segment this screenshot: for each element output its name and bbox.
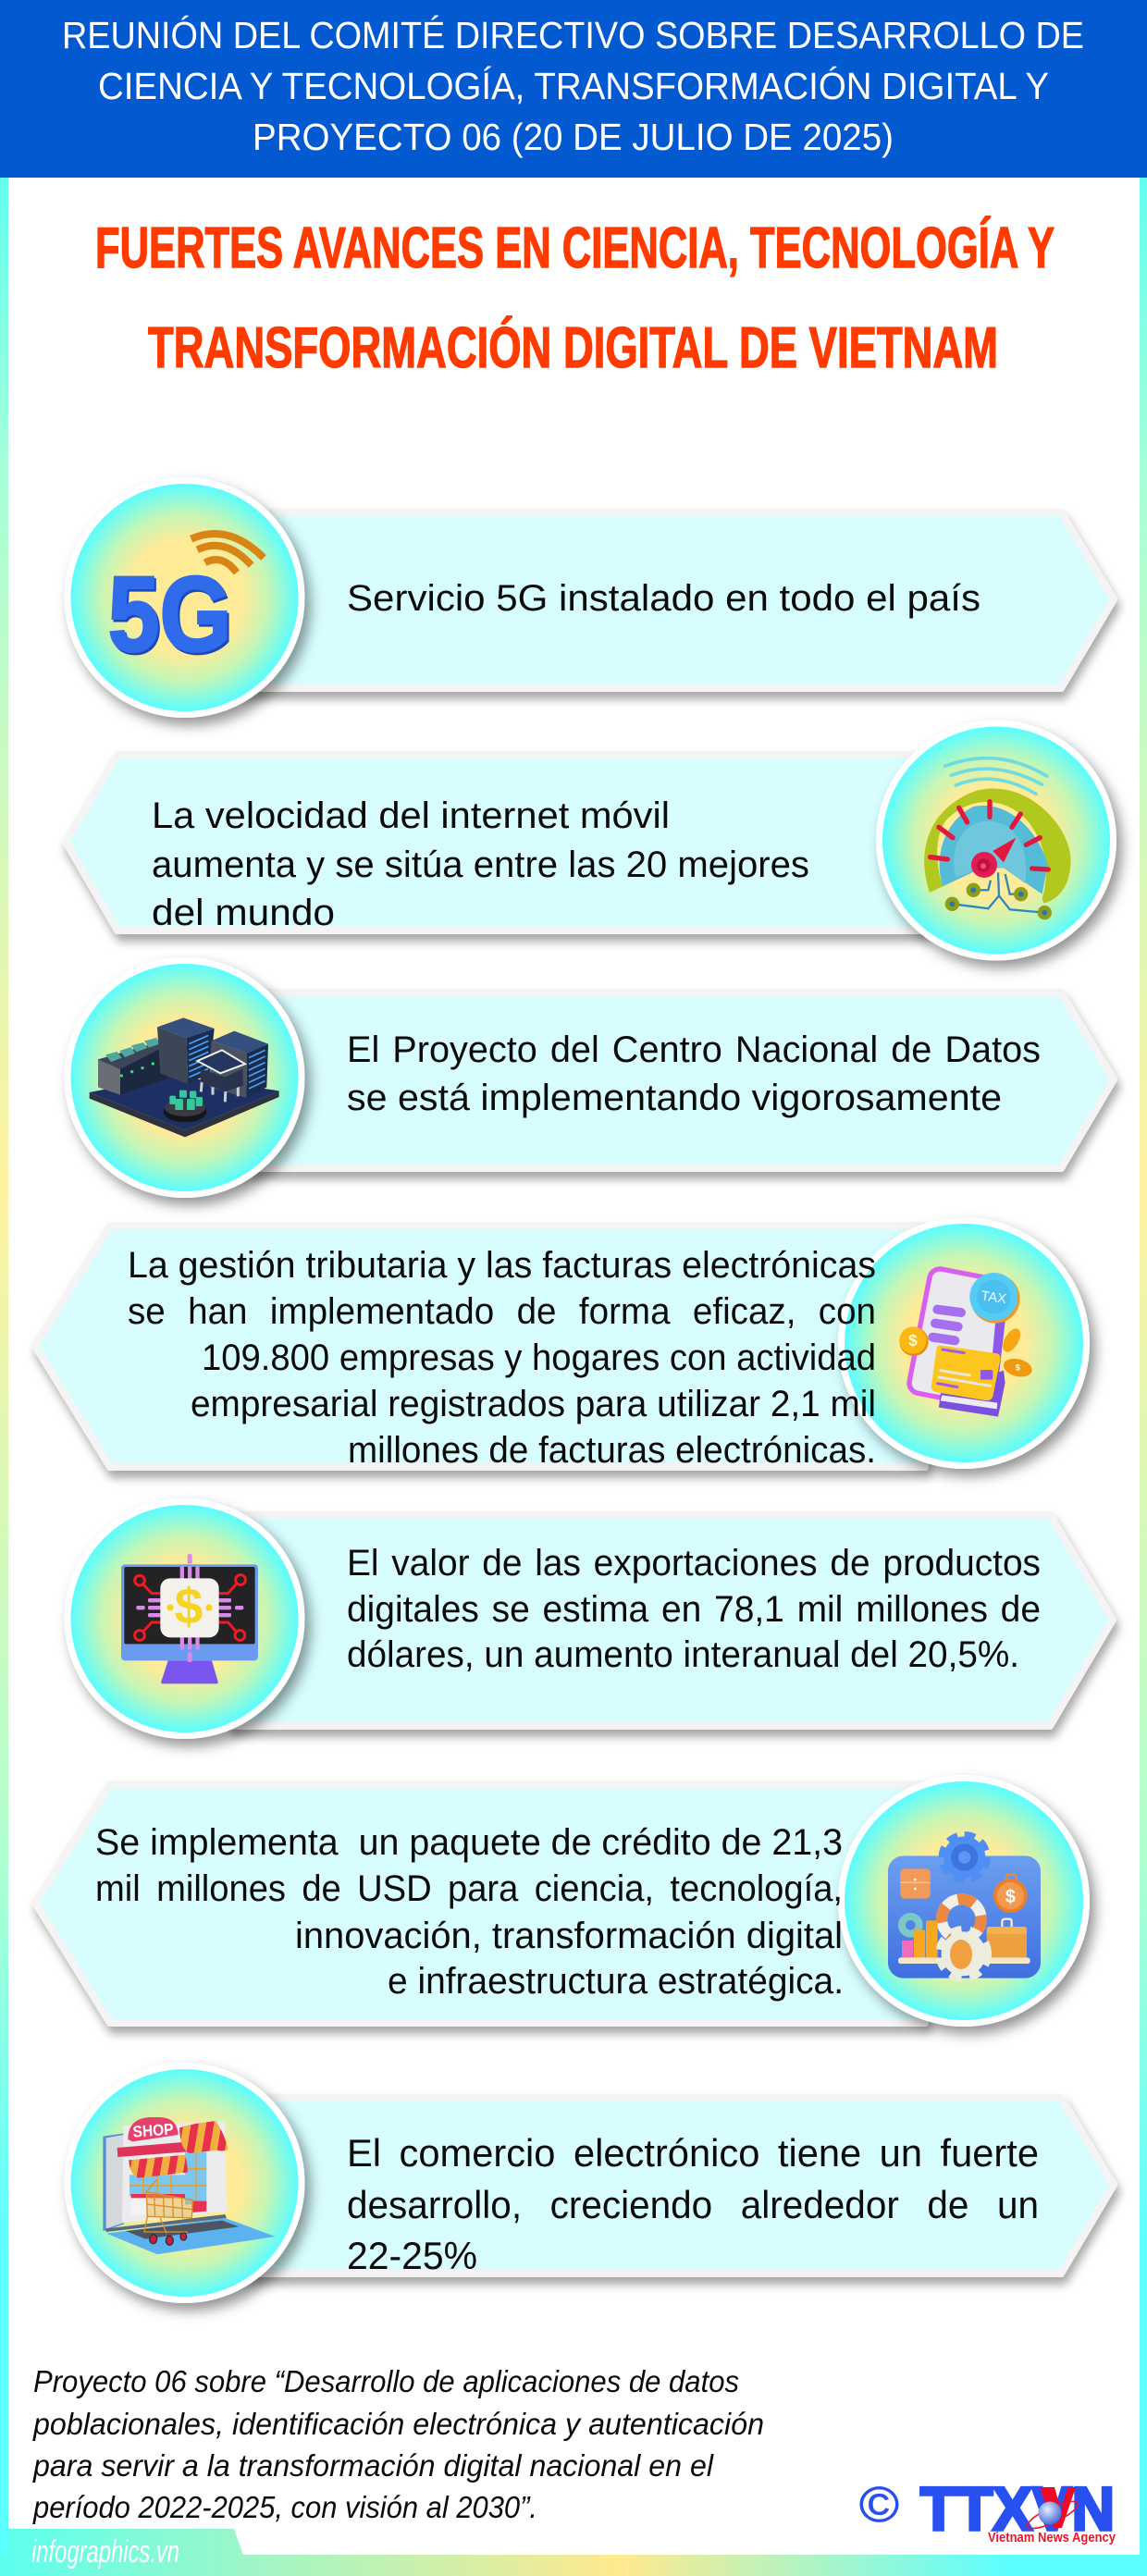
logo: TTXVN Vietnam News Agency: TTXVN <box>920 2474 1115 2543</box>
text 7 <box>347 2131 1039 2277</box>
header band: REUNIÓN DEL COMITÉ DIRECTIVO SOBRE DESARROLLO DE <box>62 14 1084 56</box>
disc 2 <box>876 720 1116 960</box>
icon: online shop on laptop: SHOP <box>132 2120 174 2141</box>
header band: CIENCIA Y TECNOLOGÍA, TRANSFORMACIÓN DIGITAL Y <box>98 65 1049 107</box>
footnote <box>32 2364 764 2524</box>
text 3: El Proyecto del Centro Nacional de Datos <box>347 1029 1041 1070</box>
logo: TTXVN Vietnam News Agency: Vietnam News Agency <box>988 2531 1116 2545</box>
footnote: Proyecto 06 sobre “Desarrollo de aplicaciones de datos <box>33 2364 739 2398</box>
text 4 <box>128 1245 876 1471</box>
icon: speed gauge <box>924 758 1070 918</box>
panel: gestión tributaria <box>35 1217 1090 1471</box>
text 2: del mundo <box>152 893 335 933</box>
disc 4 <box>838 1217 1090 1469</box>
text 4: La gestión tributaria y las facturas electrónicas <box>128 1245 876 1286</box>
text 6: e infraestructura estratégica. <box>388 1961 844 2002</box>
text 7: El comercio electrónico tiene un fuerte <box>347 2131 1039 2175</box>
arrow banner 7 <box>231 2098 1114 2274</box>
icon: monitor with dollar chip: $ <box>175 1577 203 1634</box>
text 2: La velocidad del internet móvil <box>152 795 670 836</box>
arrow banner 4 <box>35 1226 925 1467</box>
text 4: empresarial registrados para utilizar 2,1 mil <box>191 1384 876 1424</box>
bottom colour bar <box>0 2555 1147 2576</box>
panel: paquete de crédito <box>35 1775 1090 2027</box>
title <box>95 216 1054 380</box>
arrow banner 2 <box>66 755 925 931</box>
arrow banner 6 <box>35 1784 925 2023</box>
text 4: se han implementado de forma eficaz, con <box>128 1291 876 1332</box>
icon: strategy board with gears <box>888 1835 1041 1978</box>
panel: exportaciones digitales <box>65 1498 1113 1739</box>
text 4: millones de facturas electrónicas. <box>348 1430 876 1471</box>
icon: 5G with wifi: 5G <box>108 556 232 674</box>
text 5: dólares, un aumento interanual del 20,5%. <box>347 1634 1019 1675</box>
footnote: para servir a la transformación digital nacional en el <box>32 2448 715 2483</box>
header band <box>0 0 1147 178</box>
icon: tax phone and card <box>899 1267 1034 1417</box>
text 5: digitales se estima en 78,1 mil millones de <box>347 1589 1041 1630</box>
icon: tax phone and card: $ <box>908 1331 918 1350</box>
text 6: innovación, transformación digital <box>295 1916 843 1956</box>
disc 7 <box>65 2063 305 2303</box>
disc 5 <box>65 1498 305 1739</box>
footnote: período 2022-2025, con visión al 2030”. <box>32 2490 537 2524</box>
text 5 <box>347 1543 1041 1675</box>
text 3 <box>347 1029 1041 1118</box>
text 7: 22-25% <box>347 2234 477 2277</box>
icon: tax phone and card: $ <box>1016 1363 1021 1373</box>
icon: 5G with wifi: 5G <box>110 558 234 676</box>
header band: PROYECTO 06 (20 DE JULIO DE 2025) <box>253 116 894 158</box>
text 5: El valor de las exportaciones de productos <box>347 1543 1041 1584</box>
panel: centro nacional de datos <box>65 957 1114 1198</box>
disc 6 <box>838 1775 1090 2027</box>
text 7: desarrollo, creciendo alrededor de un <box>347 2183 1039 2226</box>
arrow banner 3 <box>231 992 1114 1168</box>
text 6: Se implementa un paquete de crédito de 21,3 <box>95 1822 843 1863</box>
icon: online shop on laptop <box>103 2117 276 2254</box>
disc 1 <box>65 477 305 718</box>
text 6 <box>95 1822 844 2002</box>
panel: comercio electrónico <box>65 2063 1114 2303</box>
text 2 <box>152 795 809 933</box>
arrow banner 5 <box>231 1515 1113 1726</box>
text 1: Servicio 5G instalado en todo el país <box>347 578 980 619</box>
source tab: infographics.vn: infographics.vn <box>31 2534 179 2570</box>
panel: servicio 5G <box>65 477 1114 718</box>
footnote: poblacionales, identificación electrónica y autenticación <box>32 2407 764 2441</box>
disc 3 <box>65 957 305 1198</box>
arrow banner 1 <box>231 512 1114 688</box>
text 6: mil millones de USD para ciencia, tecnología, <box>95 1868 843 1909</box>
text 2: aumenta y se sitúa entre las 20 mejores <box>152 844 809 885</box>
icon: monitor with dollar chip <box>121 1554 258 1683</box>
icon: data center <box>90 1017 279 1137</box>
logo: TTXVN Vietnam News Agency: © <box>859 2477 899 2533</box>
panel: velocidad internet móvil <box>66 720 1116 960</box>
text 3: se está implementando vigorosamente <box>347 1078 1002 1118</box>
source tab: infographics.vn <box>8 2529 251 2576</box>
icon: tax phone and card: TAX <box>980 1288 1007 1307</box>
icon: strategy board with gears: $ <box>1005 1887 1016 1907</box>
text 4: 109.800 empresas y hogares con actividad <box>202 1337 876 1378</box>
